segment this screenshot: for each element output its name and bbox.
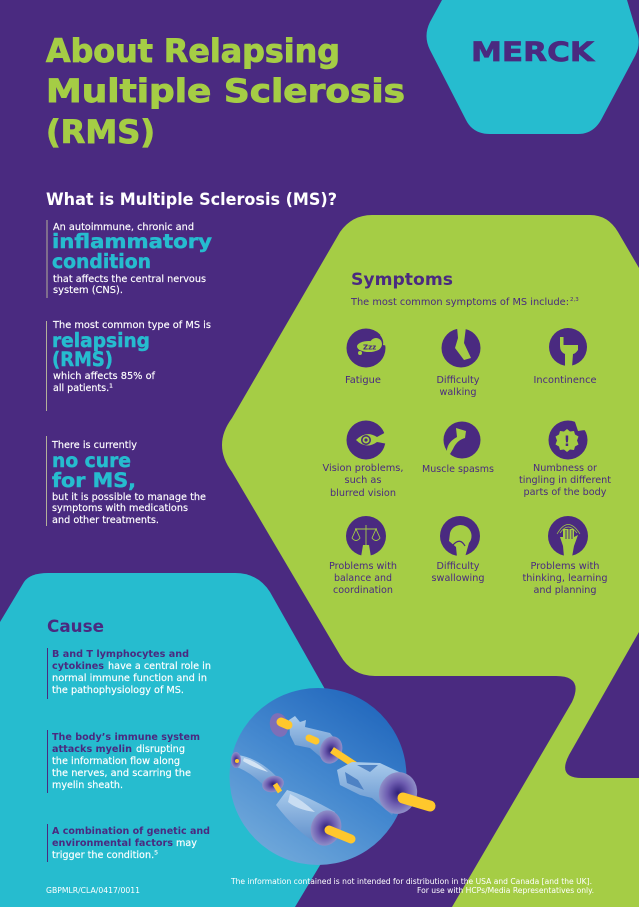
text block: inflammatory condition: An autoimmune, chronic and [53, 222, 194, 233]
label: difficulty swallowing: swallowing [432, 573, 484, 584]
text block: no cure: no cure [52, 449, 131, 472]
text block: genetic factors: may [176, 838, 197, 849]
icon: balance [346, 516, 386, 557]
logo hexagon [426, 0, 639, 134]
illustration: damaged nerves [230, 688, 430, 865]
panel: cause [0, 573, 369, 907]
text block: inflammatory condition: that affects the central nervous [53, 274, 206, 285]
text block: no cure [46, 436, 206, 526]
label: vision problems: blurred vision [330, 488, 396, 499]
icon: muscle spasms [444, 422, 480, 458]
text block: lymphocytes: normal immune function and in [52, 673, 207, 684]
label: thinking: and planning [534, 585, 596, 596]
purple corner shape [565, 632, 639, 778]
symptoms intro: The most common symptoms of MS include: [350, 297, 569, 308]
text block: relapsing: all patients.¹ [53, 383, 113, 394]
label: thinking: Problems with [530, 561, 600, 572]
disclaimer: For use with HCPs/Media Representatives only. [417, 885, 594, 895]
label: balance: coordination [333, 585, 393, 596]
text block: inflammatory condition: condition [52, 250, 151, 273]
label: muscle spasms: Muscle spasms [422, 464, 494, 475]
label: balance: Problems with [329, 561, 397, 572]
text block: immune system: disrupting [136, 744, 185, 755]
panel: symptoms [222, 215, 639, 907]
heading: What is MS: What is Multiple Sclerosis (MS)? [46, 190, 337, 210]
label: numbness: parts of the body [524, 487, 607, 498]
text block: inflammatory condition: inflammatory [52, 230, 212, 253]
text block: genetic factors: environmental factors [52, 838, 173, 849]
text block: no cure: There is currently [51, 440, 137, 451]
label: balance: balance and [334, 573, 392, 584]
disclaimer [230, 876, 594, 895]
label: incontinence: Incontinence [534, 375, 597, 386]
icon: fatigue [346, 328, 388, 368]
text block: inflammatory condition: system (CNS). [53, 285, 123, 296]
text block: no cure: for MS, [52, 469, 136, 492]
text block: inflammatory condition [46, 220, 212, 298]
text block: no cure: and other treatments. [52, 515, 159, 526]
text block: genetic factors [47, 824, 210, 862]
icon: difficulty walking [442, 327, 480, 368]
label: numbness [519, 463, 611, 498]
text block: genetic factors: trigger the condition.⁵ [52, 850, 158, 861]
label: difficulty walking: Difficulty [436, 375, 480, 386]
title: About Relapsing [46, 32, 340, 70]
label: difficulty walking: walking [440, 387, 476, 398]
logo: Merck: MERCK [471, 37, 595, 68]
label: difficulty swallowing [432, 561, 484, 584]
text block: no cure: symptoms with medications [52, 503, 188, 514]
label: numbness: tingling in different [519, 475, 611, 486]
label: vision problems [322, 463, 404, 499]
nerve: upper damaged [267, 711, 430, 818]
text block: relapsing: relapsing [52, 329, 150, 352]
icon: vision problems [346, 420, 388, 460]
label: difficulty swallowing: Difficulty [436, 561, 480, 572]
symptoms intro: 2,3 [570, 297, 579, 303]
text block: lymphocytes: B and T lymphocytes and [52, 649, 189, 660]
text block: lymphocytes: the pathophysiology of MS. [52, 685, 184, 696]
icon: thinking and planning [548, 516, 588, 557]
text block: relapsing: which affects 85% of [53, 371, 155, 382]
title: Multiple Sclerosis [46, 72, 405, 110]
text block: immune system: the nerves, and scarring the [52, 768, 191, 779]
title [46, 32, 405, 151]
label: balance [329, 561, 397, 596]
text block: immune system: attacks myelin [52, 744, 132, 755]
label: difficulty walking [436, 375, 480, 398]
text block: immune system: myelin sheath. [52, 780, 123, 791]
text block: relapsing [46, 320, 211, 411]
title: (RMS) [46, 113, 155, 151]
icon: difficulty swallowing [440, 516, 480, 557]
text block: immune system: the information flow along [52, 756, 180, 767]
label: thinking [522, 561, 608, 596]
heading: symptoms: Symptoms [351, 270, 453, 290]
heading: cause: Cause [47, 617, 104, 637]
text block: relapsing: The most common type of MS is [52, 320, 211, 331]
text block: immune system [47, 730, 200, 793]
label: vision problems: such as [344, 475, 382, 486]
text block: genetic factors: A combination of genetic and [52, 826, 210, 837]
text block: lymphocytes [47, 648, 211, 699]
text block: no cure: but it is possible to manage the [52, 492, 206, 503]
label: thinking: thinking, learning [522, 573, 608, 584]
icon: numbness or tingling: ! [564, 434, 570, 450]
text block: lymphocytes: cytokines [52, 661, 104, 672]
label: fatigue: Fatigue [345, 375, 381, 386]
disclaimer: The information contained is not intended for distribution in the USA and Canada [and the UK]. [230, 876, 592, 886]
nerve: lower intact [231, 752, 351, 850]
icon: incontinence [549, 328, 587, 367]
label: numbness: Numbness or [533, 463, 597, 474]
text block: relapsing: (RMS) [52, 348, 113, 371]
icon: numbness or tingling [548, 419, 590, 460]
reference code: GBPMLR/CLA/0417/0011 [46, 885, 140, 895]
label: vision problems: Vision problems, [322, 463, 404, 474]
text block: lymphocytes: have a central role in [108, 661, 211, 672]
icon: fatigue: Zzz [363, 344, 376, 352]
text block: immune system: The body’s immune system [52, 732, 200, 743]
